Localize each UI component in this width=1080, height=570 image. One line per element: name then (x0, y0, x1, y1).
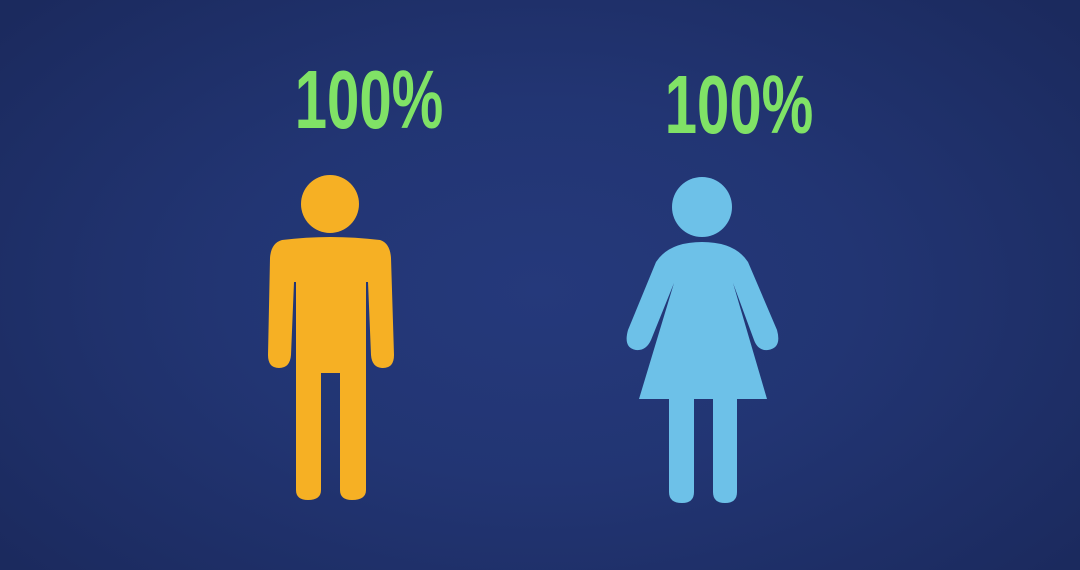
label: woman percentage: 100% (665, 59, 813, 152)
icon: man figure (268, 175, 394, 500)
label: man percentage: 100% (295, 54, 443, 147)
icon: woman figure (627, 177, 778, 503)
